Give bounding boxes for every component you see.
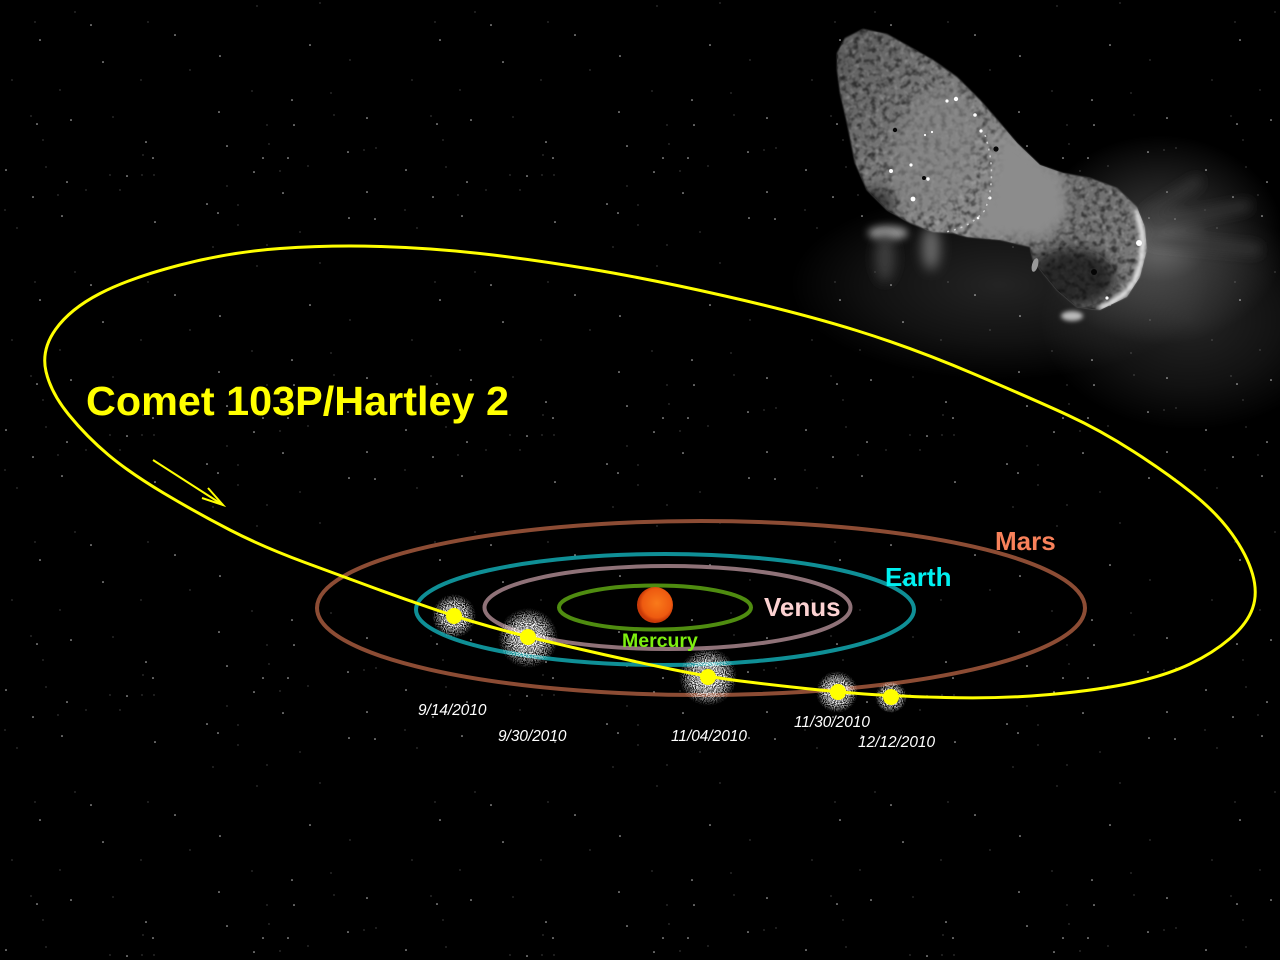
title: Comet 103P/Hartley 2 bbox=[86, 378, 509, 424]
orbit: Mars bbox=[317, 521, 1085, 695]
bright boulders bbox=[889, 97, 1142, 300]
shadow on main lobe bbox=[864, 180, 902, 216]
comet orbit bbox=[45, 246, 1255, 698]
icon: sun bbox=[637, 587, 673, 623]
label: Earth: Earth bbox=[885, 562, 951, 592]
label: Venus: Venus bbox=[764, 592, 841, 622]
comet photograph bbox=[830, 28, 1280, 409]
smooth basin bbox=[888, 82, 982, 216]
date: 9/30/2010: 9/30/2010 bbox=[498, 728, 567, 745]
crater rim arc bbox=[945, 135, 992, 232]
orbit: Venus bbox=[484, 566, 850, 649]
label: Mercury: Mercury bbox=[622, 630, 698, 652]
sunlit rim bbox=[1100, 210, 1143, 308]
orbit: Earth bbox=[416, 554, 914, 665]
comet position halos bbox=[432, 594, 907, 713]
date: 11/30/2010: 11/30/2010 bbox=[794, 714, 870, 731]
label: Mars: Mars bbox=[995, 526, 1056, 556]
nucleus body bbox=[837, 29, 1147, 310]
nucleus bbox=[830, 25, 1150, 315]
rocky texture bbox=[830, 25, 1150, 315]
planetary orbits bbox=[317, 521, 1085, 695]
shadow on lower lobe bbox=[1028, 248, 1116, 308]
date: 9/14/2010: 9/14/2010 bbox=[418, 702, 487, 719]
comet position markers bbox=[446, 608, 899, 705]
jets below the nucleus bbox=[868, 226, 1083, 321]
orbit: Mercury bbox=[559, 586, 751, 630]
dark pits bbox=[893, 128, 1097, 275]
date labels bbox=[418, 702, 935, 751]
smooth neck bbox=[970, 125, 1070, 240]
coma glow bbox=[790, 135, 1280, 430]
date: 12/12/2010: 12/12/2010 bbox=[858, 734, 935, 751]
date: 11/04/2010: 11/04/2010 bbox=[671, 728, 747, 745]
arrow: direction of travel bbox=[153, 460, 223, 505]
